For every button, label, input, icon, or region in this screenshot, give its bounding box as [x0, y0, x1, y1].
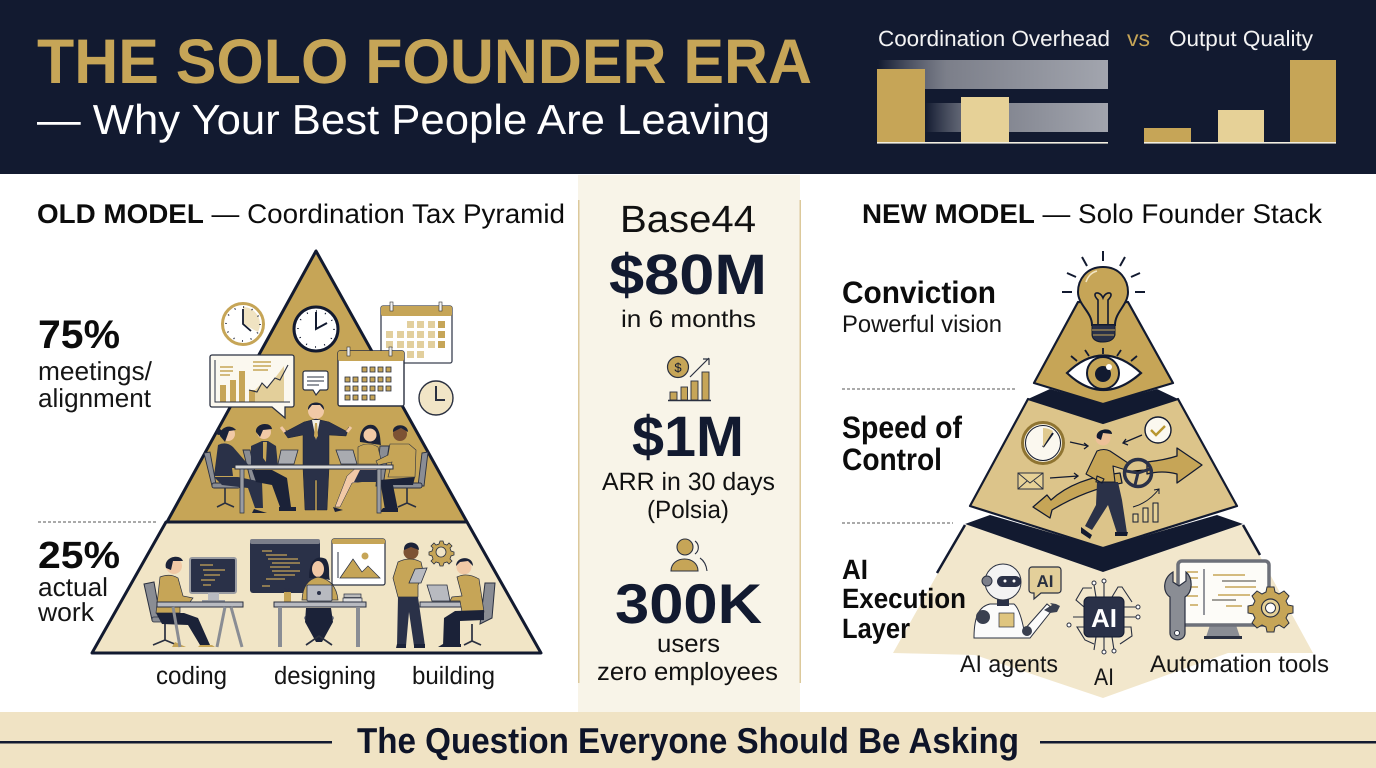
- pyramid: top section: [167, 251, 467, 522]
- chart label: output quality: Output Quality: [1169, 26, 1313, 51]
- label: meetings: meetings/: [38, 356, 153, 386]
- stack: top layer: [1034, 302, 1173, 404]
- heading: old model: OLD MODEL — Coordination Tax Pyramid: [37, 199, 565, 229]
- icon: ai chip: AI: [1091, 603, 1117, 633]
- label: in 6 months: in 6 months: [621, 306, 756, 333]
- stat: $1M: $1M: [632, 405, 744, 469]
- figure: founder at wheel: [1081, 429, 1152, 539]
- label: polsia: (Polsia): [647, 496, 729, 524]
- label: powerful vision: Powerful vision: [842, 311, 1002, 338]
- stack: navy band upper: [1028, 389, 1178, 423]
- icon: small speech bubble: [303, 371, 328, 395]
- chart label: coordination overhead: Coordination Overhead: [878, 26, 1110, 51]
- stack: navy band lower: [965, 515, 1243, 572]
- panel: centre stats: [578, 175, 801, 712]
- chart label: vs: vs: [1127, 26, 1150, 51]
- icon: users: [671, 539, 707, 571]
- label: speed of control: [842, 410, 963, 477]
- icon: robot: [974, 564, 1060, 638]
- label: coding: coding: [156, 662, 227, 690]
- title: THE SOLO FOUNDER ERA: [37, 27, 812, 97]
- label: ai: AI: [1094, 664, 1114, 691]
- seated woman left: [214, 427, 267, 513]
- icon: ai chip: [1067, 579, 1140, 654]
- label: conviction: Conviction: [842, 275, 996, 310]
- stack: bottom layer: [893, 525, 1313, 698]
- table: [235, 465, 393, 513]
- label: arr in 30 days: ARR in 30 days: [602, 468, 775, 496]
- label: designing: designing: [274, 662, 376, 690]
- label: alignment: alignment: [38, 383, 152, 413]
- label: building: building: [412, 662, 495, 690]
- icon: check circle: [1145, 417, 1171, 443]
- label: speed of control: Speed of: [842, 410, 963, 445]
- label: ai execution layer: Layer: [842, 613, 910, 644]
- stack: middle layer: [970, 399, 1237, 548]
- label: actual: actual: [38, 572, 108, 602]
- icon: revenue growth: $: [674, 360, 682, 375]
- stat: 25%: 25%: [38, 535, 120, 577]
- laptop right: [336, 450, 357, 464]
- comparison chart: [877, 26, 1336, 144]
- seated woman right: [333, 425, 382, 512]
- panel: new model: [842, 199, 1329, 698]
- label: ai execution layer: Execution: [842, 583, 966, 614]
- icon: small clock: [419, 381, 453, 415]
- label: automation tools: Automation tools: [1150, 651, 1329, 678]
- stat: 75%: 75%: [38, 313, 120, 357]
- chairs: [204, 446, 428, 488]
- icon: back calendar: [381, 302, 452, 363]
- stat: 300K: 300K: [615, 572, 762, 635]
- label: ai agents: AI agents: [960, 651, 1058, 678]
- label: ai execution layer: AI: [842, 554, 868, 585]
- label: zero employees: zero employees: [597, 658, 778, 686]
- heading: new model: NEW MODEL — Solo Founder Stack: [862, 199, 1323, 229]
- arrows: inputs: [1050, 435, 1142, 479]
- arrow: backward: [1033, 473, 1122, 518]
- footer question: The Question Everyone Should Be Asking: [357, 720, 1019, 761]
- icon: stopwatch: [1022, 422, 1064, 464]
- icon: ai speech bubble: [1029, 567, 1061, 599]
- header banner: [0, 0, 1376, 174]
- icon: light bulb: [1062, 251, 1145, 342]
- presenter: [281, 402, 351, 510]
- icon: navy clock: [294, 307, 338, 351]
- icon: gold clock: [222, 304, 264, 344]
- icon: revenue growth: [668, 356, 711, 400]
- label: base44: Base44: [620, 199, 756, 241]
- icon: chart speech bubble: [210, 355, 294, 418]
- footer banner: [0, 712, 1376, 768]
- illustration: meeting table: [204, 402, 428, 513]
- pyramid: bottom section: [92, 522, 541, 653]
- label: speed of control: Control: [842, 442, 942, 477]
- panel: old model: [37, 199, 565, 690]
- icon: front calendar: [338, 347, 404, 406]
- laptop left: [278, 450, 298, 464]
- arrow: forward: [1147, 448, 1202, 483]
- icon: envelope: [1018, 473, 1043, 489]
- icon: mini chart: [1133, 489, 1159, 522]
- overhead bars: [877, 60, 1108, 144]
- output quality bars: [1144, 60, 1336, 144]
- illustration: building workers: [393, 541, 495, 648]
- icon: ai speech bubble: AI: [1036, 572, 1054, 591]
- subtitle: — Why Your Best People Are Leaving: [37, 96, 770, 143]
- illustration: coding worker: [144, 557, 243, 647]
- label: work: work: [37, 597, 95, 627]
- seated man left: [251, 424, 296, 511]
- icon: monitor with tools: [1165, 561, 1293, 640]
- icon: eye: [1067, 348, 1141, 390]
- label: users: users: [657, 630, 720, 658]
- stat: $80M: $80M: [609, 243, 767, 307]
- illustration: designing worker: [250, 539, 385, 647]
- label: ai execution layer: [842, 554, 966, 644]
- seated man right: [376, 425, 416, 512]
